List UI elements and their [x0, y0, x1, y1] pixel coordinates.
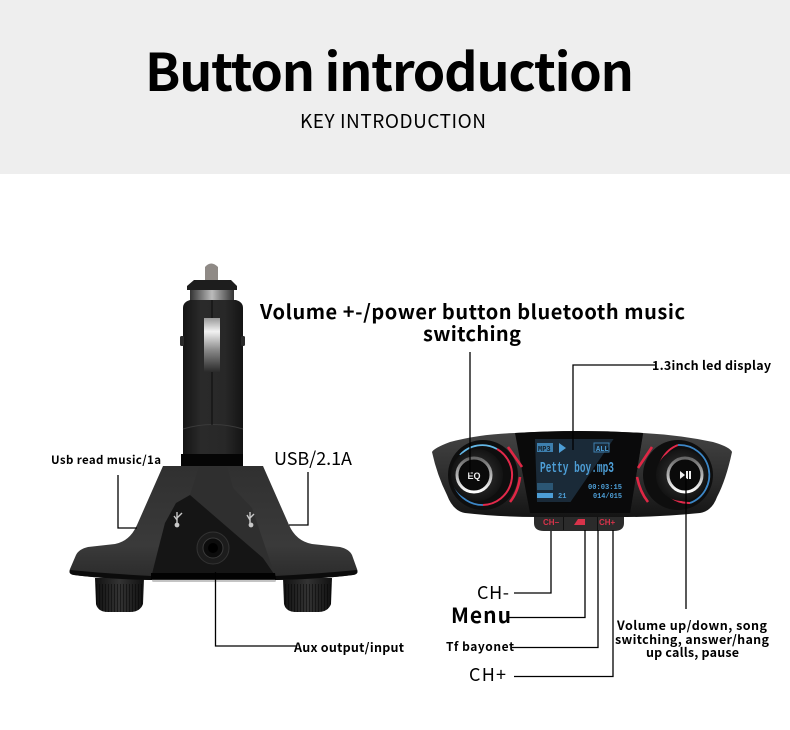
label: volume up down: [615, 615, 770, 661]
label: volume up down: Volume up/down, song: [616, 615, 768, 634]
lower black band: [151, 573, 276, 579]
label: ch plus: CH+: [469, 661, 506, 687]
label: volume power: Volume +-/power button bluetooth music: [259, 296, 685, 325]
jack: [197, 532, 229, 564]
header band: [0, 0, 790, 174]
strip button labels: CH−: [543, 518, 560, 527]
play arrow: [559, 443, 566, 453]
strip button labels: [543, 517, 616, 530]
right dial: [637, 440, 713, 510]
mp3 tag: MP3: [538, 446, 551, 454]
label: usb right: USB/2.1A: [274, 445, 352, 471]
leader lines: [118, 352, 686, 676]
device: car charger side view: [70, 264, 358, 612]
left foot knob: [95, 578, 144, 612]
label: led display: 1.3inch led display: [652, 355, 771, 374]
base lower shadow: [70, 570, 358, 580]
silver ring: [190, 290, 234, 300]
button strip: [534, 514, 624, 531]
screen bezel: [515, 431, 643, 513]
song title: Petty boy.mp3: [540, 460, 614, 477]
tip: [205, 264, 218, 281]
strip button labels: CH+: [599, 518, 616, 527]
device: transmitter front view: [432, 431, 732, 531]
track counter: 014/015: [593, 493, 622, 501]
label: volume power: [259, 296, 685, 347]
metal window: [204, 318, 220, 372]
base shell: [70, 466, 358, 580]
housing: [432, 431, 732, 517]
silver base edge: [152, 579, 276, 582]
title: Button introduction: [145, 31, 634, 106]
centre upper facet: [152, 467, 273, 572]
plug body: [183, 300, 243, 454]
label: volume power: switching: [423, 318, 521, 347]
time readout: 00:03:15: [588, 484, 622, 492]
label: menu: Menu: [451, 600, 511, 630]
right foot knob: [283, 578, 332, 612]
cap: [187, 280, 237, 290]
label: volume up down: switching, answer/hang: [615, 629, 770, 648]
track number: 21: [558, 493, 566, 501]
screen glare: [563, 434, 643, 513]
dark jack facet: [152, 495, 274, 574]
usb icon left: [174, 512, 182, 527]
mode tag: [537, 483, 553, 498]
label: volume up down: up calls, pause: [646, 642, 739, 661]
left dial: EQ: [467, 471, 481, 481]
screen: [535, 439, 628, 502]
usb icon right: [247, 512, 254, 527]
all tag: [594, 443, 609, 454]
left dial: [448, 440, 522, 510]
label: ch minus: CH-: [477, 579, 509, 605]
mp3 tag: [537, 443, 553, 454]
collar: [181, 454, 243, 466]
label: tf bayonet: Tf bayonet: [446, 638, 514, 655]
label: usb left: Usb read music/1a: [51, 452, 161, 468]
label: aux: Aux output/input: [293, 637, 405, 656]
all tag: ALL: [596, 446, 609, 454]
subtitle: KEY INTRODUCTION: [300, 107, 486, 134]
